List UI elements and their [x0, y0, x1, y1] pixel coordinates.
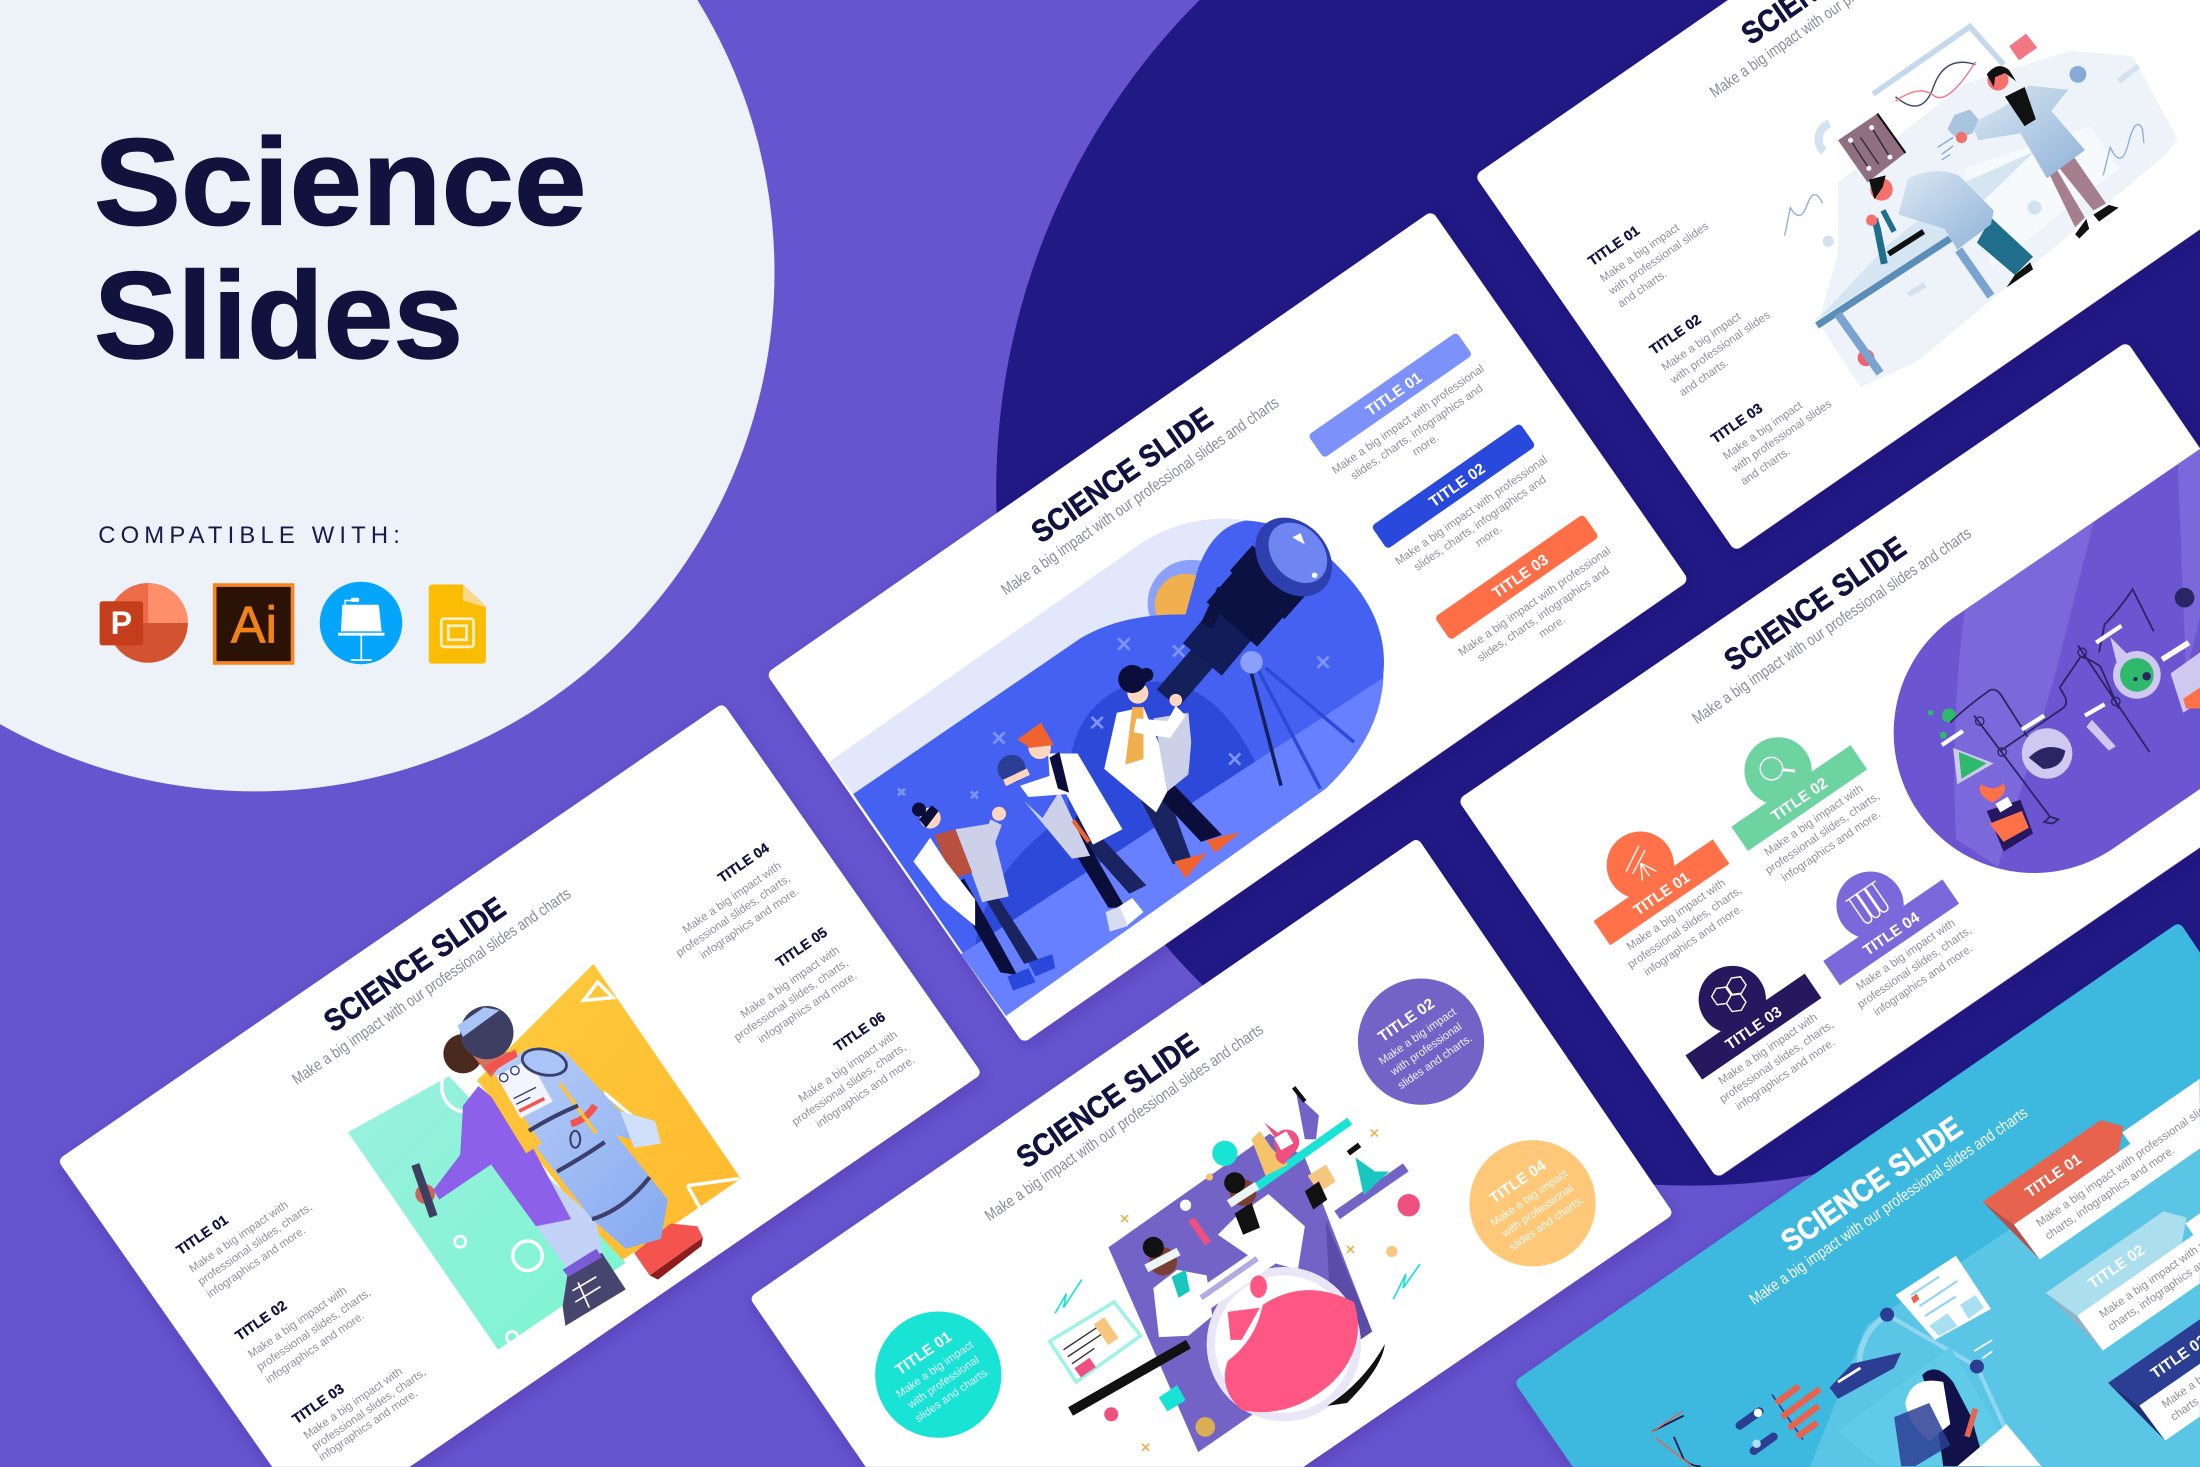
- slide 1 right text column: professional slides, charts,: [790, 1042, 909, 1128]
- item 2: professional slides, charts,: [1763, 790, 1882, 877]
- figure left: [960, 878, 1016, 974]
- slide 1 left text column: Make a big impact with: [302, 1366, 405, 1442]
- item 4: TITLE 04: [1860, 909, 1923, 959]
- item 4: professional slides, charts,: [1855, 925, 1974, 1011]
- navy background circle: [996, 0, 2200, 1186]
- slide 3 card with text: with professional slides: [1668, 309, 1773, 387]
- slide 1 right text column: infographics and more.: [814, 1054, 917, 1131]
- illustration: big flask and scientists: [1049, 1087, 1420, 1452]
- item 1: TITLE 01: [1631, 869, 1694, 919]
- slide 3 card with text: Make a big impact: [1660, 310, 1744, 374]
- item 4: infographics and more.: [1872, 943, 1975, 1019]
- slide 3 card with text: Make a big impact: [1721, 399, 1805, 463]
- item 4: Make a big impact with: [1854, 917, 1958, 993]
- panel: slide lab microscope: [1475, 0, 2200, 551]
- item 3: professional slides, charts,: [1718, 1019, 1836, 1105]
- icon: PowerPoint: P: [111, 605, 132, 641]
- item 1: Make a big impact with: [1625, 877, 1728, 953]
- item 2: TITLE 02: [1768, 775, 1831, 825]
- slide 2 card with text: TITLE 01: [1363, 369, 1426, 420]
- banner title 01: [1983, 1059, 2200, 1268]
- slide 1 left text column: infographics and more.: [317, 1388, 420, 1464]
- slide 1 right text column: professional slides, charts,: [674, 873, 793, 960]
- slide 1 heading: SCIENCE SLIDE: [317, 890, 512, 1039]
- slide 2 card with text: slides, charts, infographics and: [1349, 383, 1485, 483]
- slide 1 right text column: Make a big impact with: [681, 860, 784, 936]
- slide 1 right text column: professional slides, charts,: [732, 957, 851, 1044]
- slide 6 card: [1516, 924, 2200, 1467]
- slide 2 card with text: slides, charts, infographics and: [1475, 565, 1612, 665]
- circle title 02: [1333, 954, 1509, 1129]
- slide 2 card with text: SCIENCE SLIDE: [1025, 400, 1219, 550]
- panel: slide astronaut: [60, 705, 980, 1467]
- slide 1 left text column: professional slides, charts,: [196, 1201, 315, 1288]
- panel: slide blue: [1516, 924, 2200, 1467]
- icon: Keynote: [320, 582, 402, 664]
- circle title 02: slides and charts.: [1396, 1033, 1475, 1092]
- slide 6 heading: Make a big impact with our professional slides and charts: [1746, 1104, 2031, 1309]
- circle title 01: Make a big impact: [894, 1339, 977, 1401]
- circle title 04: Make a big impact: [1488, 1167, 1571, 1229]
- banner title 01: charts, infographics and more.: [2043, 1144, 2177, 1242]
- illustration: astronaut scientist: [348, 964, 741, 1350]
- circle title 01: TITLE 01: [892, 1328, 955, 1379]
- slide 2 card with text: Make a big impact with professional: [1393, 454, 1550, 568]
- slide 1 heading: Make a big impact with our professional slides and charts: [289, 885, 574, 1089]
- main title: Slides: [94, 247, 463, 385]
- item 1: professional slides, charts,: [1626, 885, 1744, 971]
- item 3: TITLE 03: [1723, 1003, 1786, 1054]
- item 2: infographics and more.: [1780, 808, 1883, 884]
- slide 1 left text column: infographics and more.: [205, 1225, 308, 1301]
- slide 5 card: [752, 840, 1671, 1467]
- circle title 02: Make a big impact: [1377, 1006, 1459, 1068]
- slide 2 card with text: [766, 211, 1689, 1043]
- main title: [94, 113, 586, 385]
- slide 1 right text column: TITLE 04: [715, 839, 772, 886]
- slide 3 card with text: with professional slides: [1606, 220, 1711, 298]
- slide 1 left text column: TITLE 01: [173, 1211, 231, 1258]
- figure centre: [1072, 812, 1146, 894]
- slide 1 right text column: [651, 839, 918, 1141]
- slide 1 right text column: Make a big impact with: [739, 945, 842, 1021]
- slide 1 right text column: Make a big impact with: [797, 1029, 900, 1105]
- slide 2 card with text: Make a big impact with professional: [1457, 545, 1613, 659]
- slide 2 card with text: more.: [1410, 432, 1441, 459]
- banner title 02: [2046, 1150, 2200, 1359]
- icon: Illustrator: Ai: [231, 597, 277, 655]
- illustration: chemistry flasks: [1894, 449, 2200, 873]
- circle title 04: [1445, 1115, 1620, 1291]
- slide 4 card with text: SCIENCE SLIDE: [1718, 529, 1912, 678]
- icon: PowerPoint: [100, 583, 188, 663]
- circle title 04: slides and charts.: [1507, 1194, 1586, 1254]
- slide 1 card: [60, 705, 980, 1467]
- slide 1 left text column: Make a big impact with: [187, 1199, 291, 1275]
- banner title 03: [2108, 1240, 2200, 1449]
- slide 2 card with text: Make a big impact with professional: [1330, 363, 1487, 477]
- slide 1 left text column: professional slides, charts,: [255, 1287, 373, 1374]
- slide 3 card with text: TITLE 03: [1708, 400, 1766, 446]
- slide 5 heading: Make a big impact with our professional slides and charts: [982, 1021, 1267, 1225]
- compatible label: COMPATIBLE WITH:: [98, 522, 400, 549]
- slide 1 right text column: TITLE 06: [831, 1008, 888, 1055]
- banner title 01: TITLE 01: [2022, 1151, 2085, 1201]
- circle title 01: slides and charts.: [913, 1366, 992, 1425]
- slide 2 card with text: TITLE 03: [1489, 551, 1552, 602]
- slide 2 card with text: Make a big impact with our professional slides and charts: [998, 394, 1282, 599]
- slide 3 card with text: TITLE 02: [1646, 311, 1704, 358]
- slide 2 card with text: more.: [1537, 614, 1568, 641]
- icon: Illustrator: [215, 585, 293, 663]
- slide 2 card with text: TITLE 02: [1426, 460, 1489, 511]
- circle title 02: TITLE 02: [1375, 995, 1438, 1046]
- panel: slide circles: [752, 840, 1671, 1467]
- slide 6 heading: SCIENCE SLIDE: [1774, 1109, 1969, 1259]
- illustration: scientists at lab bench: [1785, 27, 2178, 387]
- circle title 04: with professional: [1499, 1183, 1576, 1240]
- slide 3 card with text: and charts.: [1739, 446, 1792, 488]
- slide 1 left text column: TITLE 02: [232, 1297, 290, 1344]
- lighter panel: [1810, 1101, 2200, 1467]
- panel: slide flasks: [1458, 342, 2200, 1178]
- item 3: Make a big impact with: [1717, 1011, 1820, 1087]
- illustration: lab technician at screen: [1651, 1256, 2041, 1466]
- item 1: infographics and more.: [1642, 903, 1745, 979]
- slide 1 right text column: infographics and more.: [698, 886, 801, 962]
- slide 1 right text column: infographics and more.: [756, 970, 859, 1046]
- slide 3 card with text: with professional slides: [1729, 398, 1834, 476]
- slide 1 left text column: Make a big impact with: [246, 1285, 349, 1361]
- illustration: telescope scene: [829, 502, 1384, 1016]
- slide 4 card with text: Make a big impact with our professional slides and charts: [1689, 524, 1975, 728]
- slide 1 left text column: professional slides, charts,: [310, 1367, 428, 1453]
- circle title 04: TITLE 04: [1487, 1157, 1550, 1208]
- slide 3 card with text: [1475, 0, 2200, 551]
- slide 3 card with text: and charts.: [1677, 357, 1731, 399]
- panel: slide telescope: [766, 211, 1689, 1043]
- slide 3 card with text: TITLE 01: [1585, 222, 1643, 269]
- main title: Science: [94, 113, 586, 251]
- slide 1 left text column: infographics and more.: [264, 1310, 367, 1386]
- item 3: [1655, 930, 1849, 1120]
- slide 5 heading: SCIENCE SLIDE: [1010, 1026, 1204, 1175]
- item 1: [1563, 795, 1757, 986]
- slide 4 card with text: [1458, 342, 2200, 1178]
- item 2: Make a big impact with: [1762, 783, 1866, 859]
- slide 1 right text column: TITLE 05: [773, 924, 830, 970]
- item 4: [1793, 835, 1987, 1026]
- circle title 02: with professional: [1388, 1021, 1464, 1079]
- circle title 01: with professional: [905, 1354, 982, 1412]
- item 3: infographics and more.: [1734, 1037, 1837, 1113]
- light header circle: [0, 0, 774, 791]
- slide 2 card with text: slides, charts, infographics and: [1412, 474, 1549, 574]
- circle title 01: [850, 1287, 1026, 1462]
- slide 2 card with text: more.: [1474, 523, 1505, 550]
- figure right: [1141, 793, 1191, 864]
- banner title 02: TITLE 02: [2086, 1242, 2148, 1293]
- item 2: [1701, 701, 1895, 892]
- slide 1 left text column: [173, 1168, 435, 1464]
- icon: Google Slides: [429, 585, 486, 664]
- slide 1 left text column: TITLE 03: [289, 1380, 347, 1427]
- slide 3 card with text: and charts.: [1616, 268, 1669, 310]
- slide 3 card with text: Make a big impact: [1598, 221, 1682, 285]
